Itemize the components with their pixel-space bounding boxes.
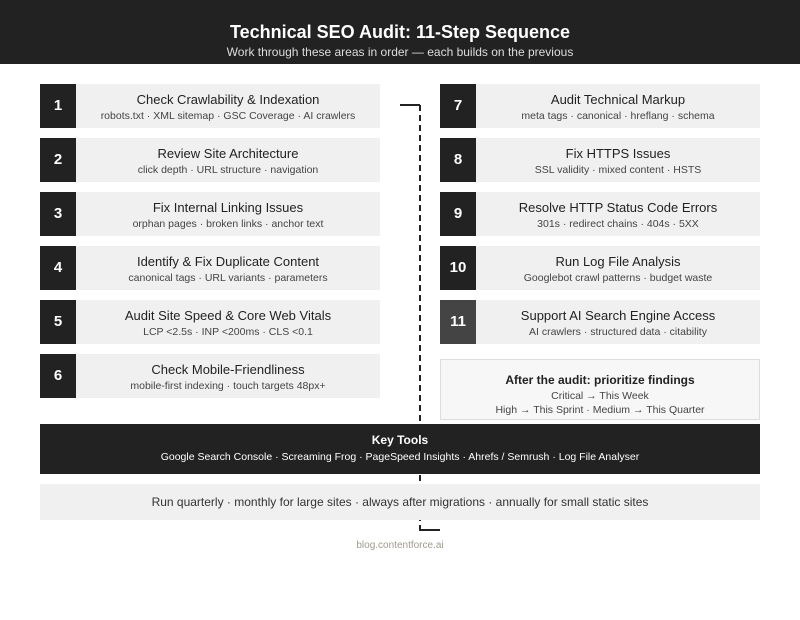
- header: Technical SEO Audit: 11-Step Sequence: [230, 22, 570, 42]
- frequency bar: Run quarterly · monthly for large sites · always after migrations · annually for small static sites: [152, 495, 648, 509]
- frequency bar: [40, 484, 760, 520]
- step 10: Run Log File Analysis: [555, 254, 680, 269]
- step 8: SSL validity · mixed content · HSTS: [535, 164, 701, 176]
- step 11: AI crawlers · structured data · citability: [529, 326, 707, 338]
- step 1: 1: [54, 97, 62, 114]
- step 11: 11: [450, 313, 466, 330]
- step 1: robots.txt · XML sitemap · GSC Coverage · AI crawlers: [101, 110, 355, 122]
- footer: blog.contentforce.ai: [356, 540, 444, 551]
- step 5: [40, 300, 380, 344]
- step 10: 10: [450, 259, 466, 276]
- header: [0, 0, 800, 64]
- after audit callout: [440, 359, 760, 420]
- step 6: 6: [54, 367, 62, 384]
- step 5: 5: [54, 313, 62, 330]
- step 6: Check Mobile-Friendliness: [151, 362, 305, 377]
- step 9: [440, 192, 760, 236]
- step 7: 7: [454, 97, 462, 114]
- step 1: [40, 84, 380, 128]
- step 11: [440, 300, 760, 344]
- step 8: Fix HTTPS Issues: [566, 146, 670, 161]
- step 2: 2: [54, 151, 62, 168]
- step 3: orphan pages · broken links · anchor text: [133, 218, 323, 230]
- step 10: Googlebot crawl patterns · budget waste: [524, 272, 712, 284]
- step 4: Identify & Fix Duplicate Content: [137, 254, 319, 269]
- step 5: Audit Site Speed & Core Web Vitals: [125, 308, 331, 323]
- step 9: Resolve HTTP Status Code Errors: [519, 200, 717, 215]
- step 6: [40, 354, 380, 398]
- step 7: Audit Technical Markup: [551, 92, 685, 107]
- step 8: [440, 138, 760, 182]
- step 2: [40, 138, 380, 182]
- key tools: [40, 424, 760, 474]
- step 8: 8: [454, 151, 462, 168]
- step 6: mobile-first indexing · touch targets 48px+: [130, 380, 326, 392]
- step 3: 3: [54, 205, 62, 222]
- after audit callout: Critical → This Week: [551, 390, 649, 402]
- step 4: 4: [54, 259, 62, 276]
- key tools: Key Tools: [372, 433, 428, 447]
- step 3: Fix Internal Linking Issues: [153, 200, 303, 215]
- step 2: click depth · URL structure · navigation: [138, 164, 318, 176]
- step 7: [440, 84, 760, 128]
- after audit callout: High → This Sprint · Medium → This Quarter: [495, 404, 705, 416]
- step 2: Review Site Architecture: [158, 146, 298, 161]
- step 4: canonical tags · URL variants · parameters: [128, 272, 328, 284]
- step 11: Support AI Search Engine Access: [521, 308, 715, 323]
- step 5: LCP <2.5s · INP <200ms · CLS <0.1: [143, 326, 313, 338]
- step 1: Check Crawlability & Indexation: [137, 92, 319, 107]
- step 4: [40, 246, 380, 290]
- step 10: [440, 246, 760, 290]
- header: Work through these areas in order — each builds on the previous: [227, 45, 573, 59]
- step 7: meta tags · canonical · hreflang · schema: [521, 110, 715, 122]
- step 9: 9: [454, 205, 462, 222]
- step 3: [40, 192, 380, 236]
- key tools: Google Search Console · Screaming Frog · PageSpeed Insights · Ahrefs / Semrush · Log File Analyser: [161, 451, 639, 463]
- after audit callout: After the audit: prioritize findings: [505, 373, 695, 387]
- step 9: 301s · redirect chains · 404s · 5XX: [537, 218, 699, 230]
